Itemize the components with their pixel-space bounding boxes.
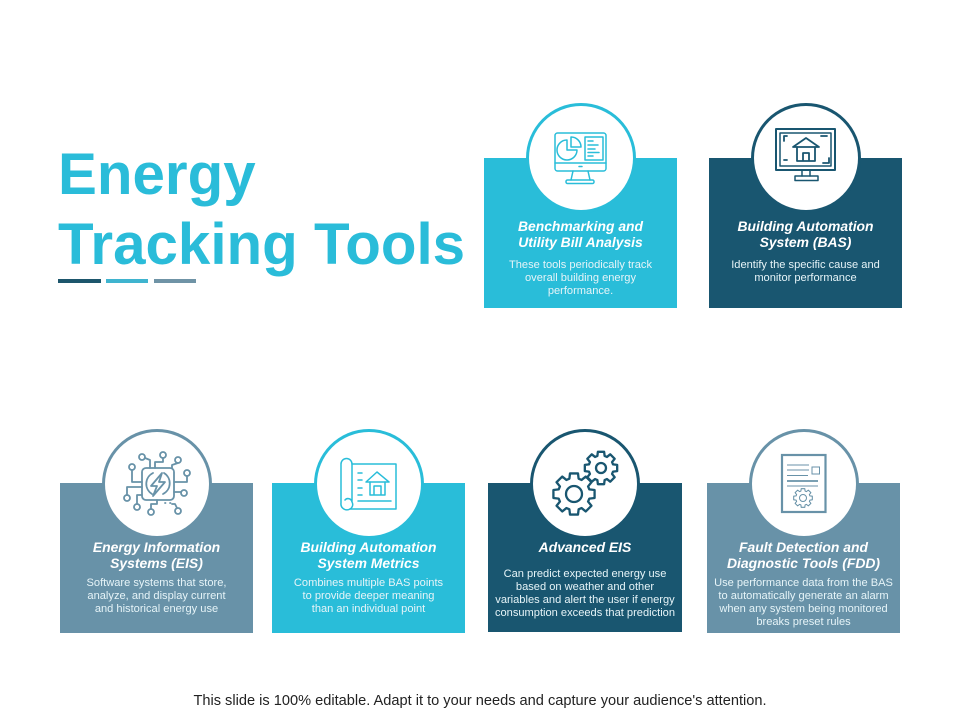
body text: These tools periodically track	[509, 258, 652, 270]
heading: Systems (EIS)	[110, 555, 203, 571]
body text: performance.	[548, 284, 613, 296]
heading	[737, 218, 874, 250]
body text: to automatically generate an alarm	[718, 590, 889, 602]
icon: document with gear	[782, 455, 826, 512]
body text	[509, 258, 652, 296]
body text	[495, 568, 675, 618]
body text: based on weather and other	[516, 580, 654, 592]
body text: to provide deeper meaning	[302, 590, 434, 602]
heading: System Metrics	[318, 555, 419, 571]
body text: Software systems that store,	[87, 576, 226, 588]
heading: Fault Detection and	[739, 539, 868, 555]
title accent bars	[58, 279, 196, 283]
panel: energy information systems	[60, 429, 253, 633]
icon: monitor with pie chart and report	[555, 133, 606, 184]
heading	[300, 539, 437, 571]
body text: Identify the specific cause and	[731, 258, 880, 270]
heading	[518, 218, 644, 250]
body text: analyze, and display current	[87, 590, 226, 602]
body text: breaks preset rules	[756, 616, 851, 628]
heading: Building Automation	[737, 218, 874, 234]
heading	[727, 539, 880, 571]
footer note: This slide is 100% editable. Adapt it to your needs and capture your audience's attention.	[193, 693, 767, 709]
body text	[714, 576, 893, 628]
panel: building automation system	[709, 103, 902, 308]
body text	[731, 258, 880, 284]
title: Tracking Tools	[58, 212, 465, 277]
body text: Combines multiple BAS points	[294, 576, 443, 588]
heading: Utility Bill Analysis	[518, 234, 643, 250]
panel: benchmarking and utility bill analysis	[484, 103, 677, 308]
heading: Advanced EIS	[539, 539, 631, 555]
heading: Diagnostic Tools (FDD)	[727, 555, 880, 571]
body text	[294, 576, 443, 614]
body text: than an individual point	[312, 602, 425, 614]
icon: monitor with house	[776, 129, 835, 180]
panel: advanced EIS	[488, 429, 682, 632]
icon: two gears	[553, 452, 617, 515]
body text: Use performance data from the BAS	[714, 576, 893, 588]
icon: blueprint with house	[341, 459, 396, 510]
body text: variables and alert the user if energy	[495, 594, 675, 606]
heading: System (BAS)	[760, 234, 851, 250]
heading: Energy Information	[93, 539, 220, 555]
icon: circuit chip with lightning bolt	[124, 452, 190, 515]
body text: and historical energy use	[95, 602, 218, 614]
title	[58, 142, 465, 277]
heading	[93, 539, 220, 571]
body text: Can predict expected energy use	[504, 568, 666, 580]
heading: Benchmarking and	[518, 218, 643, 234]
body text: consumption exceeds that prediction	[495, 606, 675, 618]
body text: overall building energy	[525, 272, 636, 284]
body text	[87, 576, 226, 614]
title: Energy	[58, 142, 256, 207]
panel: fault detection and diagnostic tools	[707, 429, 900, 633]
panel: building automation system metrics	[272, 429, 465, 633]
heading: Building Automation	[300, 539, 437, 555]
body text: monitor performance	[754, 272, 857, 284]
body text: when any system being monitored	[719, 602, 888, 614]
